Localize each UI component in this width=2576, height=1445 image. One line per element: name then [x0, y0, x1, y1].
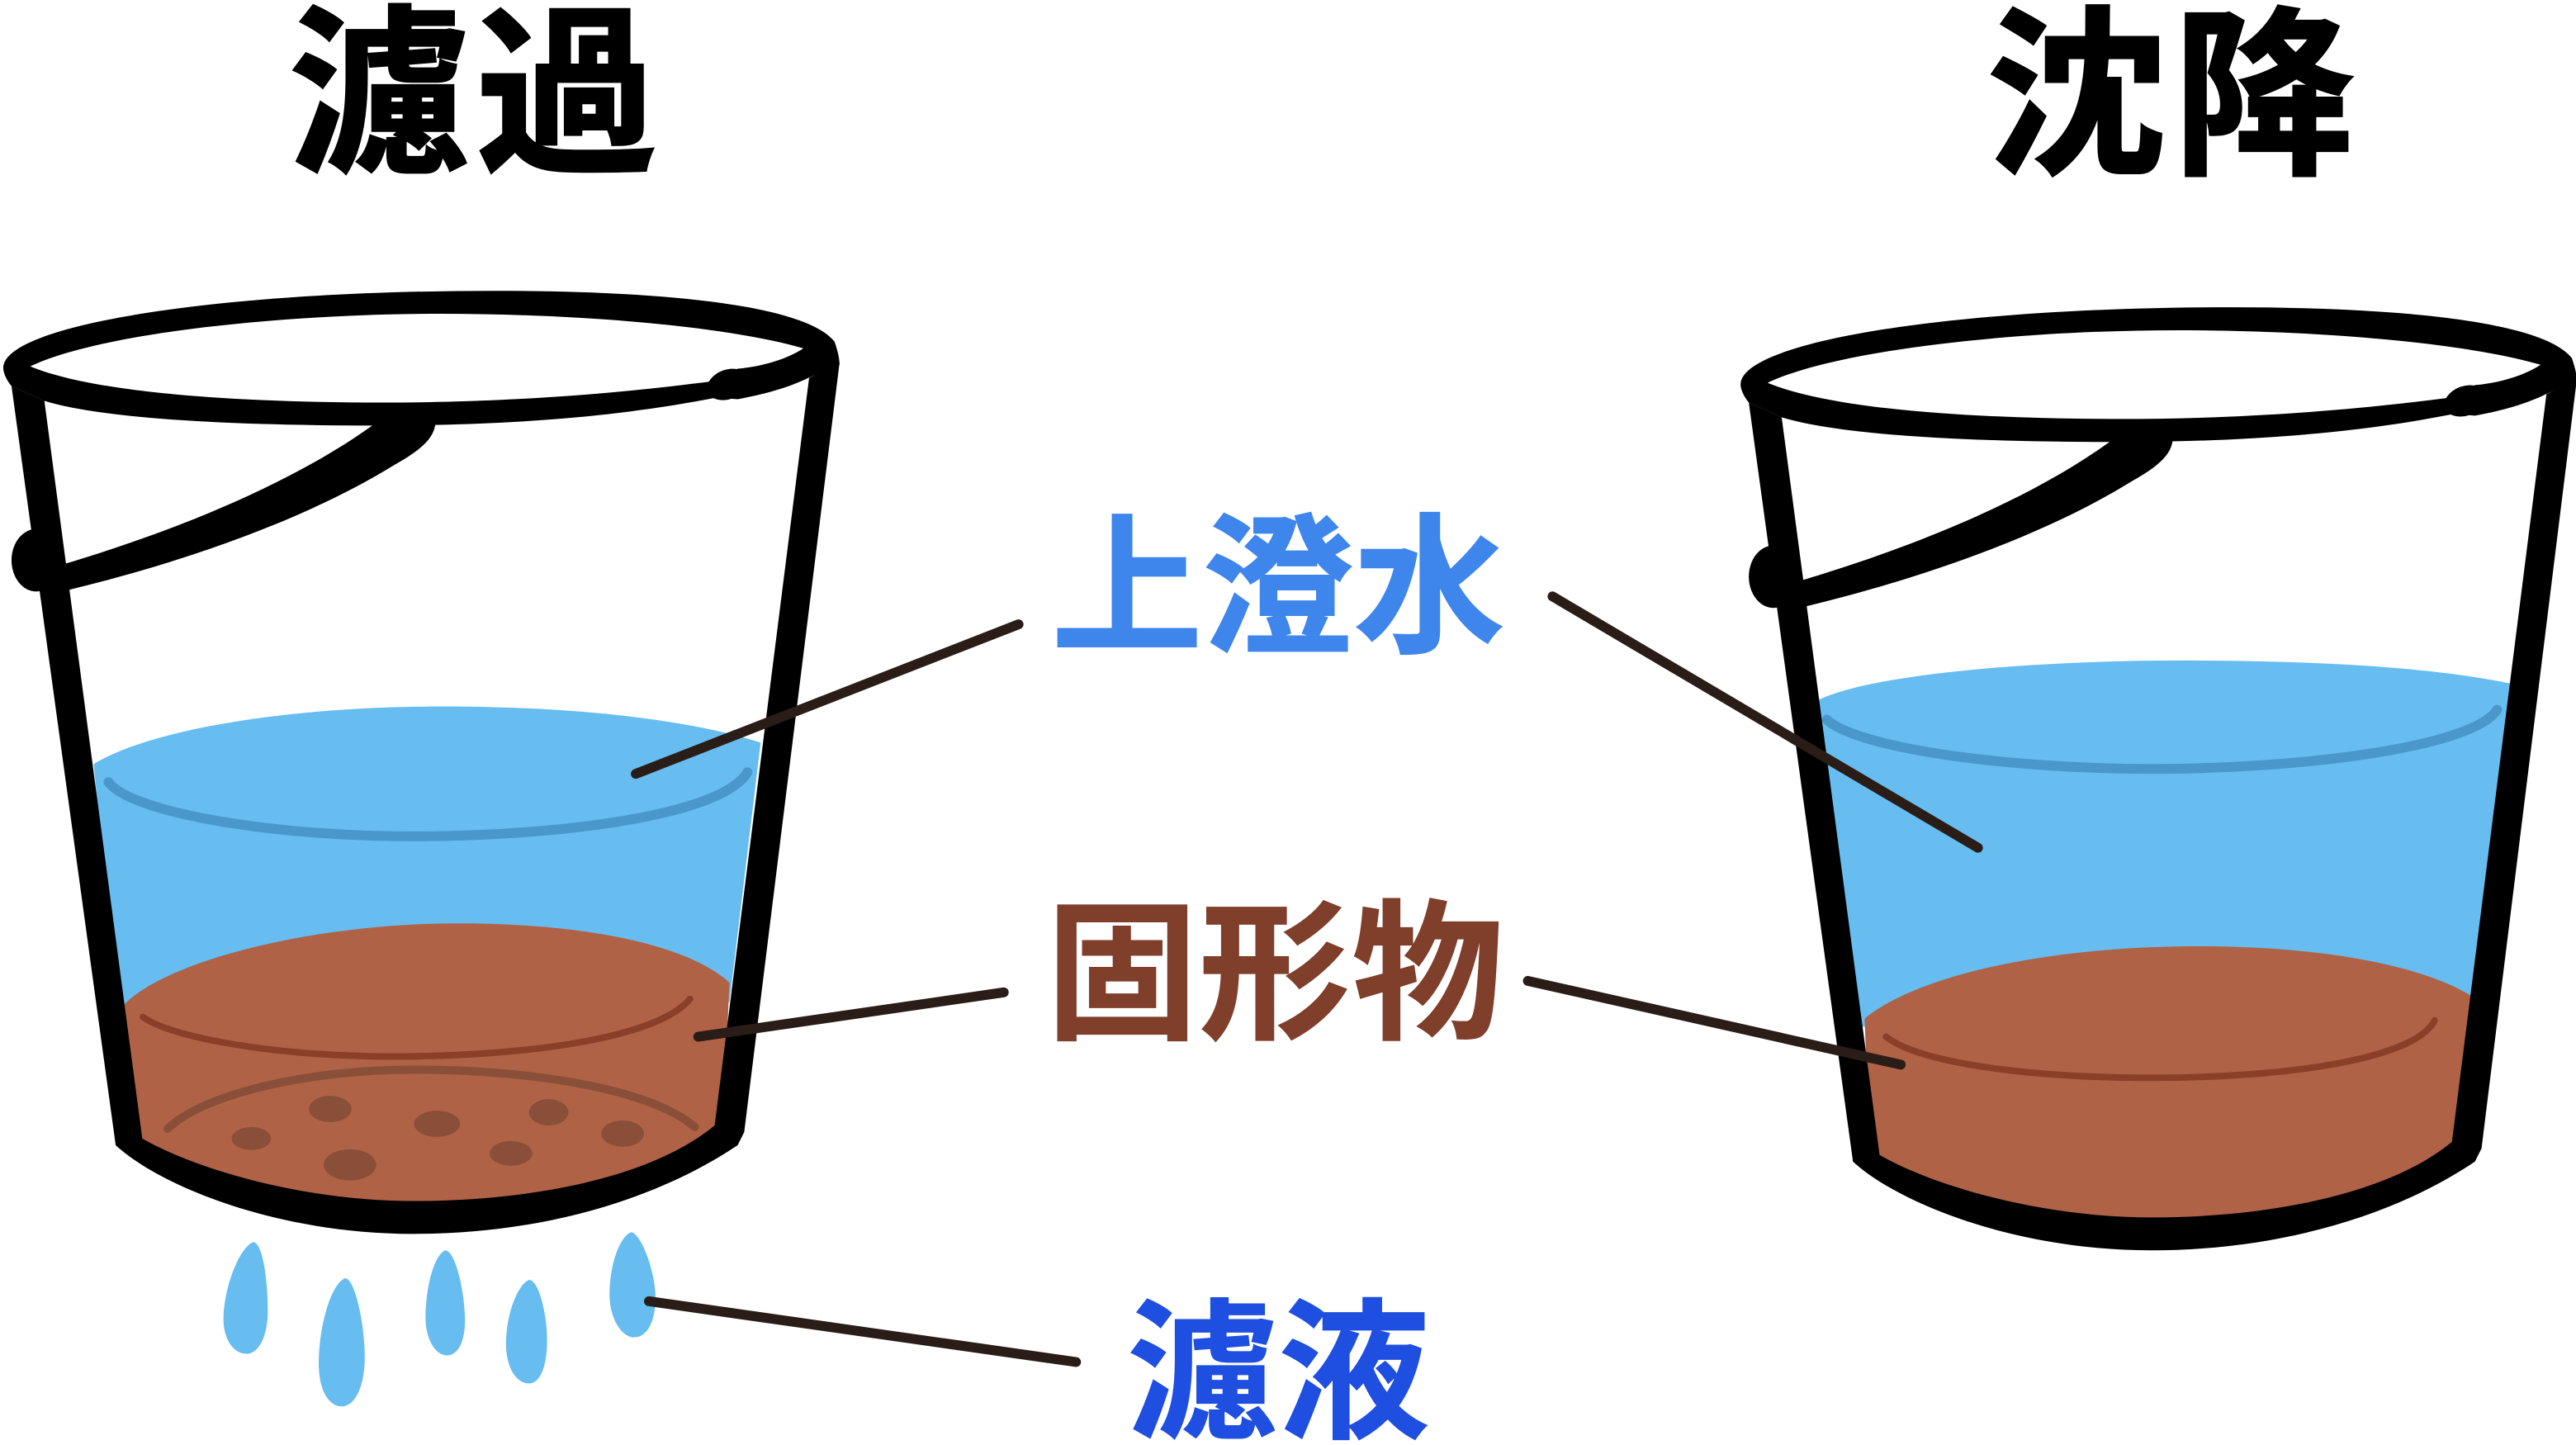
water surface line — [1827, 710, 2497, 769]
solids layer: sedimentation bucket — [1864, 946, 2471, 1224]
bucket outline — [12, 363, 840, 1234]
filter holes — [232, 1096, 644, 1181]
handle knob — [1749, 546, 1798, 608]
bucket rim — [3, 291, 840, 425]
filter plate line — [168, 1069, 695, 1129]
bucket handle — [1803, 440, 2172, 606]
solids detail line — [1886, 1021, 2435, 1078]
bucket: sedimentation — [1740, 307, 2576, 1250]
bucket: filtration — [3, 291, 840, 1234]
leader lines — [636, 596, 1978, 1362]
bucket rim — [1740, 307, 2576, 442]
rim knob — [703, 363, 753, 405]
water surface line — [108, 772, 747, 836]
label: solids: 固形物 — [1047, 890, 1505, 1059]
title: filtration: 濾過 — [289, 0, 664, 197]
label: supernatant: 上澄水 — [1051, 504, 1505, 673]
water: filtration bucket — [93, 707, 760, 1011]
rim knob — [2440, 380, 2490, 422]
solids layer: filtration bucket — [123, 923, 729, 1207]
title: sedimentation: 沈降 — [1986, 0, 2361, 198]
handle knob — [12, 529, 61, 591]
water: sedimentation bucket — [1819, 661, 2510, 1027]
bucket handle — [66, 424, 435, 590]
bucket outline — [1749, 380, 2576, 1250]
bucket parts — [1740, 307, 2576, 1250]
solids upper line — [143, 999, 690, 1056]
filtrate drops — [224, 1232, 656, 1406]
